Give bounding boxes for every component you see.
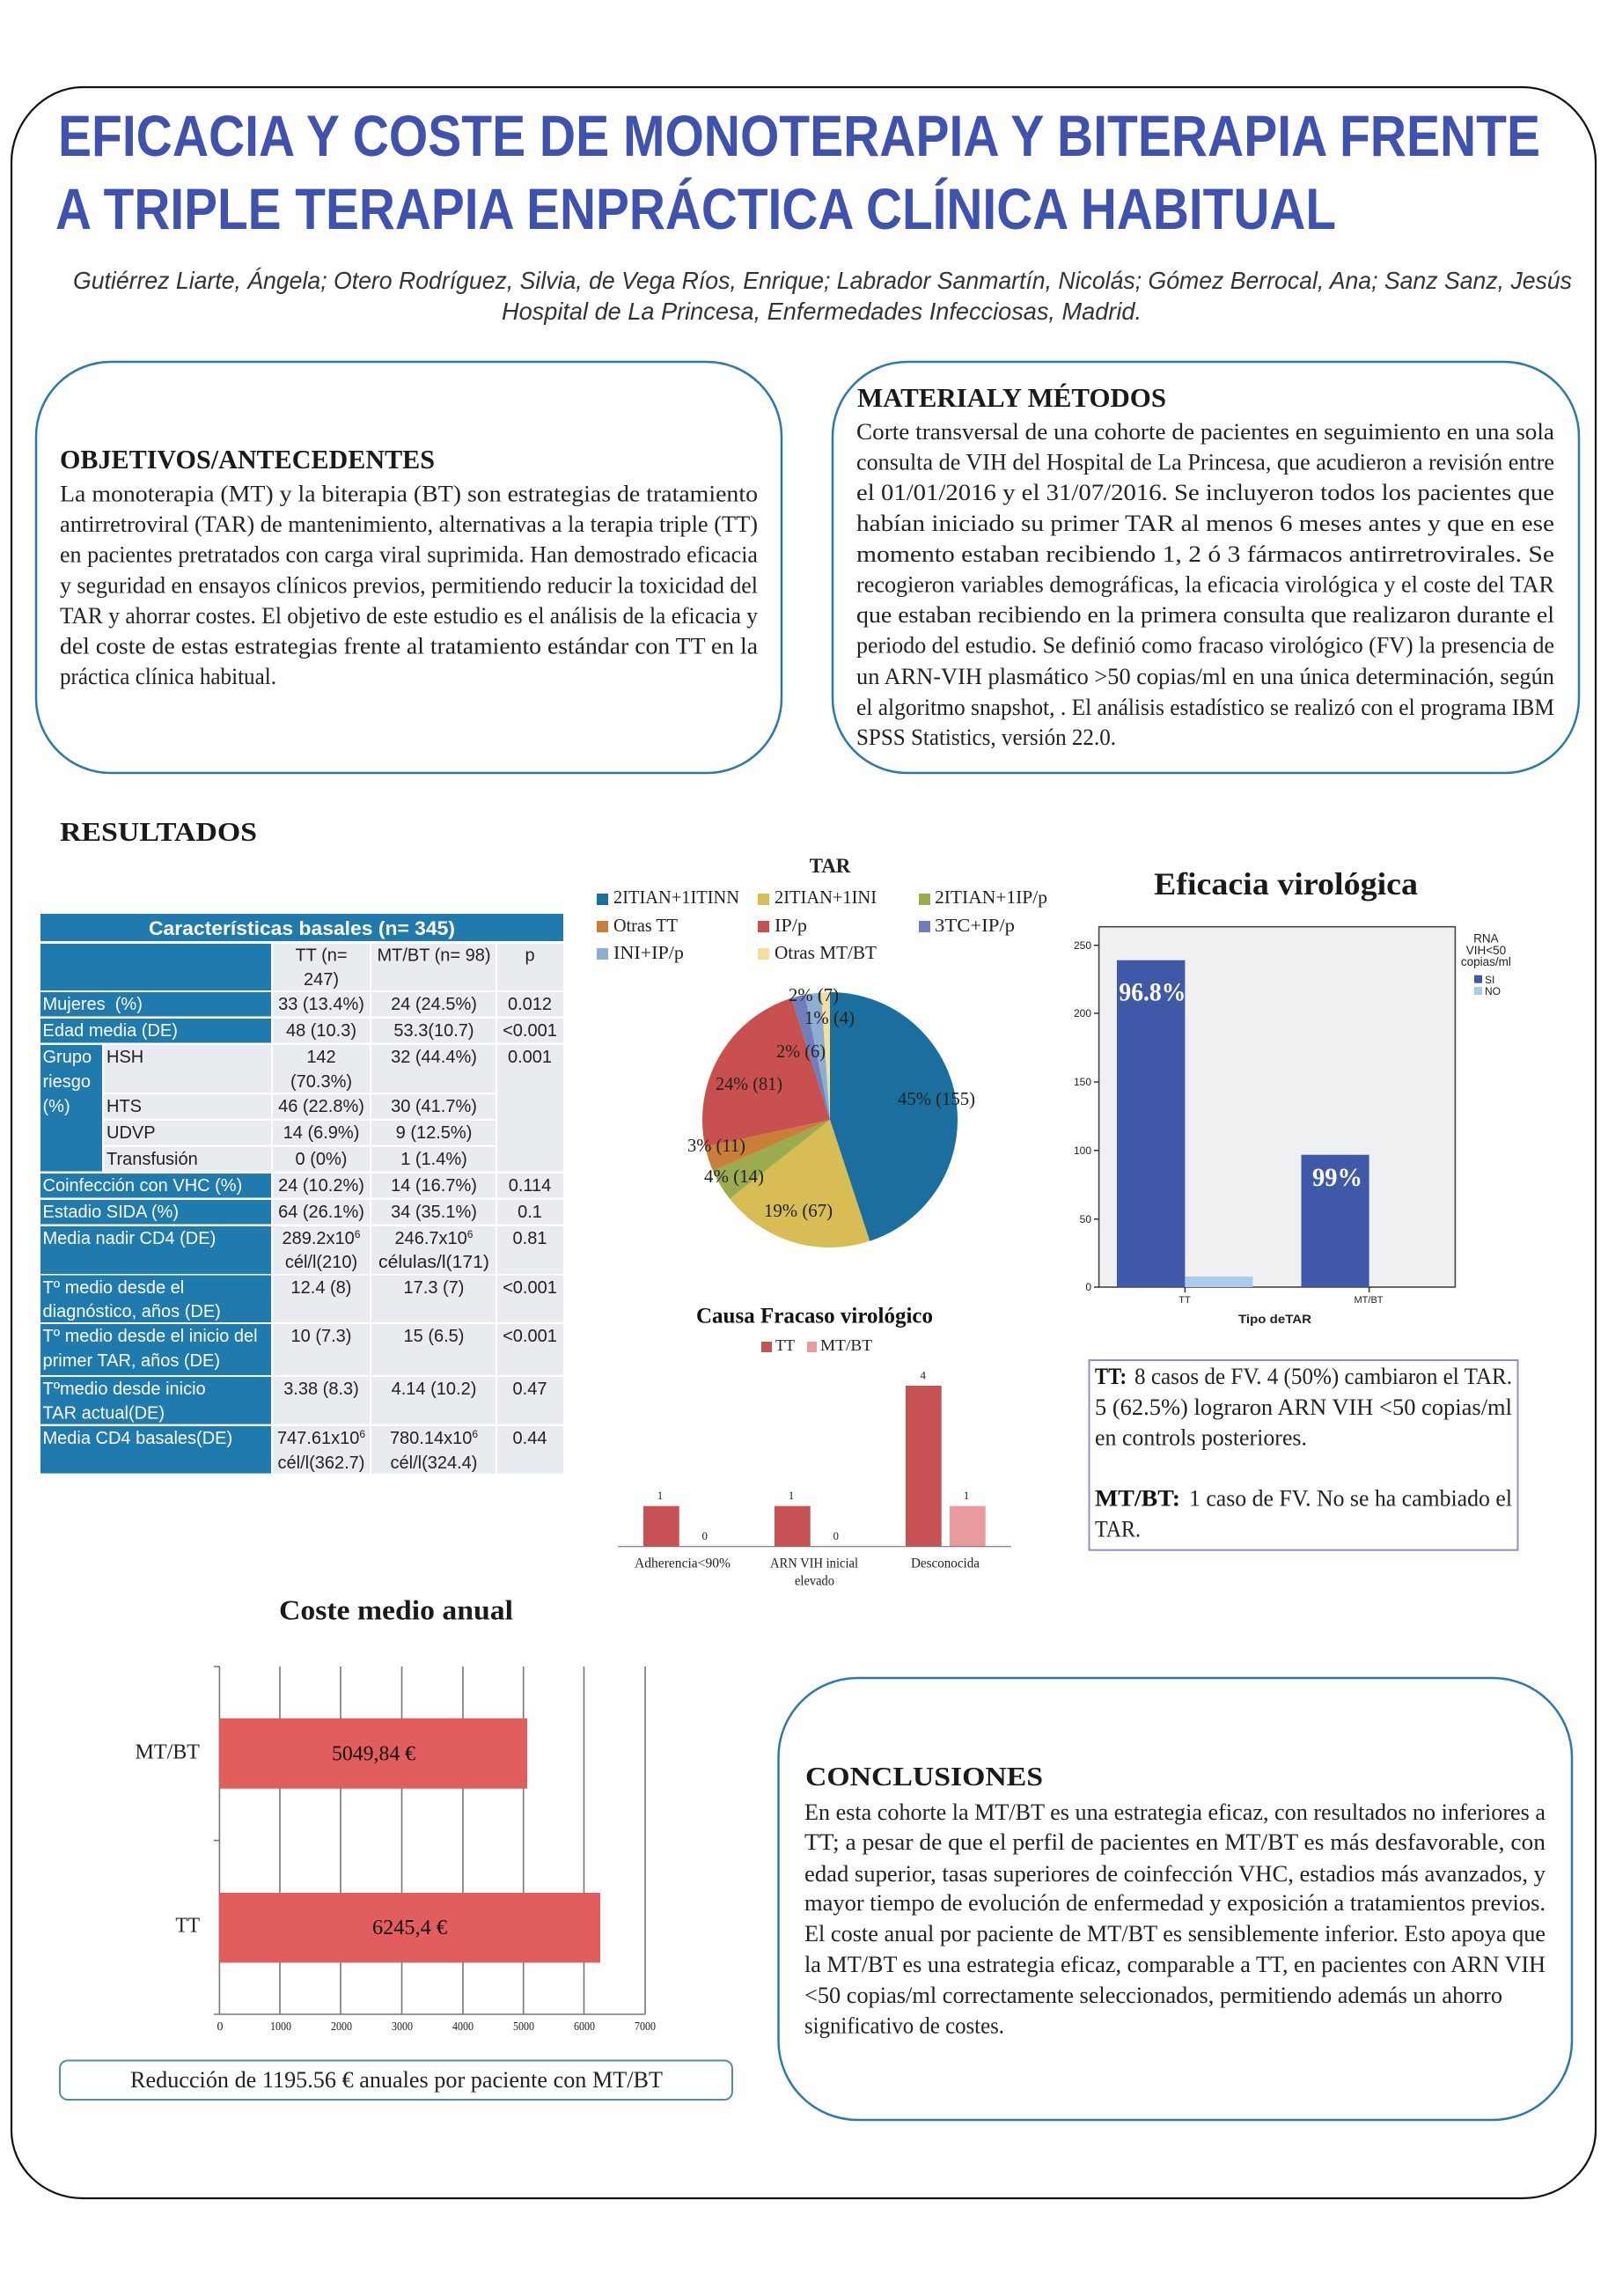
legend: RNA	[1461, 932, 1511, 997]
text: material y metodos: momento estaban recibiendo 1, 2 ó 3 fármacos antirretrovirales. Se	[856, 541, 1554, 567]
bar value labels	[1119, 978, 1362, 1192]
pie labels: 3% (11)	[687, 1135, 745, 1156]
callout: casos de fracaso virologico	[1090, 1360, 1517, 1550]
heading: conclusiones: CONCLUSIONES	[805, 1761, 1043, 1792]
legend: TAR: INI+IP/p	[613, 942, 684, 963]
chart: causa fracaso virologico	[618, 1305, 1011, 1589]
row: media cd4 basales	[40, 1426, 563, 1474]
category labels: Desconocida	[911, 1556, 980, 1571]
legend: RNA: RNA	[1473, 932, 1499, 946]
panel: material y metodos	[833, 362, 1579, 773]
x axis labels: coste: 3000	[392, 2020, 413, 2034]
x axis title: Tipo deTAR	[1238, 1312, 1311, 1326]
rows: grupo riesgo: 46 (22.8%)	[278, 1097, 364, 1116]
text: conclusiones: El coste anual por paciente de MT/BT es sensiblemente inferior. Esto apoya que	[804, 1921, 1546, 1946]
title: A TRIPLE TERAPIA ENPRÁCTICA CLÍNICA HABITUAL	[55, 176, 1336, 241]
table title	[40, 914, 563, 941]
text: material y metodos: el 01/01/2016 y el 31/07/2016. Se incluyeron todos los pacientes que	[856, 480, 1554, 505]
legend: TAR: 2ITIAN+1INI	[775, 887, 877, 908]
row: tiempo desde primer tar: primer TAR, años (DE)	[42, 1351, 220, 1371]
rows: grupo riesgo: (70.3%)	[290, 1072, 352, 1092]
text: material y metodos: que estaban recibiendo en la primera consulta que realizaron durante el	[856, 602, 1554, 628]
rows: grupo riesgo: HSH	[106, 1048, 143, 1067]
row: tiempo desde primer tar: 15 (6.5)	[404, 1327, 464, 1346]
rows: grupo riesgo: 0 (0%)	[296, 1150, 347, 1169]
plot area	[1094, 927, 1455, 1292]
table header row: p	[525, 946, 535, 965]
row: edad media	[40, 1019, 563, 1042]
row: edad media: Edad media (DE)	[42, 1021, 178, 1041]
title	[55, 103, 1540, 241]
row: estadio sida: Estadio SIDA (%)	[42, 1203, 179, 1222]
category labels: ARN VIH inicial	[770, 1556, 858, 1571]
legend: TAR: 2ITIAN+1IP/p	[935, 887, 1047, 908]
row: tiempo tar actual: 4.14 (10.2)	[392, 1380, 476, 1399]
legend: causa fracaso: MT/BT	[820, 1336, 872, 1354]
row: edad media: 53.3(10.7)	[393, 1021, 474, 1041]
table title: Características basales (n= 345)	[149, 917, 455, 939]
rows: grupo riesgo: 32 (44.4%)	[391, 1048, 477, 1067]
rows: grupo riesgo: 14 (6.9%)	[283, 1123, 359, 1143]
x axis labels: coste: 1000	[270, 2020, 291, 2034]
row: tiempo tar actual: 0.47	[513, 1380, 547, 1399]
row: media nadir cd4: 6	[467, 1228, 474, 1240]
table header row: TT (n=	[295, 946, 348, 965]
text: material y metodos: periodo del estudio. Se definió como fracaso virológico (FV) la presencia de	[856, 633, 1554, 659]
text: material y metodos: recogieron variables demográficas, la eficacia virológica y el coste del TAR	[856, 572, 1555, 598]
row: tiempo desde primer tar: <0.001	[503, 1327, 557, 1346]
chart: eficacia virologica	[1074, 866, 1511, 1326]
x axis labels: coste: 0	[217, 2020, 224, 2034]
row: estadio sida: 64 (26.1%)	[278, 1203, 364, 1222]
text: conclusiones: la MT/BT es una estrategia eficaz, comparable a TT, en pacientes con ARN VIH	[804, 1952, 1546, 1977]
chart title: TAR: TAR	[810, 855, 851, 877]
legend: TAR: IP/p	[775, 915, 807, 936]
pie labels: 19% (67)	[764, 1200, 833, 1221]
y axis labels: 250	[1074, 939, 1091, 952]
row: tiempo desde diagnostico: <0.001	[503, 1278, 557, 1298]
legend: causa fracaso	[761, 1336, 872, 1354]
panel: objetivos	[36, 362, 782, 773]
bar values: 0	[701, 1529, 708, 1542]
category labels	[635, 1556, 980, 1589]
rows: grupo riesgo: 1 (1.4%)	[400, 1150, 467, 1169]
table header row	[40, 944, 563, 990]
y axis labels: 200	[1074, 1007, 1091, 1019]
text: conclusiones	[804, 1799, 1546, 2039]
category labels: coste: MT/BT	[136, 1741, 200, 1764]
row: tiempo desde primer tar: 10 (7.3)	[291, 1327, 351, 1346]
rows: grupo riesgo: 9 (12.5%)	[396, 1123, 472, 1143]
row: tiempo tar actual	[40, 1377, 563, 1424]
x axis labels: coste: 7000	[635, 2020, 656, 2034]
rows: grupo riesgo: riesgo	[42, 1072, 91, 1092]
rows: grupo riesgo: Transfusión	[106, 1150, 198, 1169]
row: coinfeccion	[40, 1174, 563, 1197]
x axis labels: TT	[1178, 1295, 1191, 1306]
text: material y metodos: SPSS Statistics, versión 22.0.	[856, 725, 1116, 750]
pie labels: 2% (7)	[789, 984, 839, 1005]
text: conclusiones: En esta cohorte la MT/BT es una estrategia eficaz, con resultados no inferiores a	[804, 1799, 1546, 1825]
category labels: Adherencia<90%	[635, 1556, 731, 1571]
heading: objetivos: OBJETIVOS/ANTECEDENTES	[60, 444, 435, 475]
authors and affiliation: Gutiérrez Liarte, Ángela; Otero Rodríguez, Silvia, de Vega Ríos, Enrique; Labrador Sanmartín, Nicolás; Gómez Berrocal, Ana; Sanz Sanz, Jesús	[73, 267, 1572, 294]
text: objetivos: en pacientes pretratados con carga viral suprimida. Han demostrado eficacia	[60, 542, 758, 568]
row: estadio sida: 34 (35.1%)	[391, 1203, 477, 1222]
legend: TAR	[597, 887, 1047, 963]
row: coinfeccion: Coinfección con VHC (%)	[42, 1176, 242, 1196]
row: mujeres: 0.012	[508, 995, 552, 1014]
y axis labels: 100	[1074, 1144, 1091, 1157]
bar values: 1	[789, 1489, 794, 1502]
legend: RNA: SI	[1485, 974, 1494, 986]
pie labels: 24% (81)	[716, 1073, 782, 1094]
row: tiempo desde diagnostico: diagnóstico, años (DE)	[42, 1302, 221, 1321]
row: media nadir cd4: 246.7x10	[395, 1229, 467, 1248]
row: mujeres	[40, 992, 563, 1016]
rows: grupo riesgo: 30 (41.7%)	[391, 1097, 477, 1116]
row: estadio sida: 0.1	[518, 1203, 542, 1222]
chart title: coste: Coste medio anual	[279, 1593, 513, 1625]
row: media cd4 basales: 747.61x10	[277, 1429, 359, 1448]
chart title: causa fracaso: Causa Fracaso virológico	[696, 1305, 933, 1328]
bar values: 1	[964, 1489, 969, 1502]
rows: grupo riesgo: HTS	[106, 1097, 142, 1116]
row: tiempo tar actual: 3.38 (8.3)	[283, 1380, 359, 1399]
table header row: MT/BT (n= 98)	[377, 946, 491, 965]
y axis labels: 150	[1074, 1076, 1091, 1088]
category labels: coste: TT	[175, 1915, 200, 1938]
text: material y metodos: habían iniciado su primer TAR al menos 6 meses antes y que en ese	[856, 511, 1554, 536]
row: media cd4 basales: 780.14x10	[390, 1429, 472, 1448]
bar values: 1	[657, 1489, 663, 1502]
row: tiempo desde primer tar	[40, 1324, 563, 1375]
row: tiempo desde diagnostico: 17.3 (7)	[404, 1278, 464, 1298]
legend: RNA: NO	[1485, 985, 1501, 997]
text: conclusiones: edad superior, tasas superiores de coinfección VHC, estadios más avanzados, y	[804, 1861, 1546, 1887]
chart: TAR pie	[597, 855, 1047, 1221]
row: edad media: <0.001	[503, 1021, 557, 1041]
text: conclusiones: <50 copias/ml correctamente seleccionados, permitiendo además un ahorro	[804, 1983, 1502, 2008]
x axis labels: MT/BT	[1354, 1295, 1384, 1306]
text: conclusiones: TT; a pesar de que el perfil de pacientes en MT/BT es más desfavorable, con	[804, 1829, 1546, 1855]
pie labels: 1% (4)	[804, 1007, 855, 1028]
legend: TAR: Otras TT	[613, 915, 678, 936]
row: tiempo desde diagnostico: 12.4 (8)	[291, 1278, 351, 1298]
axes and gridlines	[214, 1667, 645, 2014]
table header row: 247)	[304, 970, 339, 990]
row: coinfeccion: 14 (16.7%)	[391, 1176, 477, 1196]
row: media nadir cd4: 289.2x10	[283, 1229, 355, 1248]
row: coinfeccion: 0.114	[509, 1176, 551, 1196]
row: tiempo desde diagnostico: Tº medio desde el	[42, 1278, 184, 1298]
text: objetivos	[60, 481, 758, 689]
bars: causa fracaso	[618, 1386, 1011, 1547]
bar values: 0	[833, 1529, 839, 1542]
x axis labels: coste	[217, 2020, 656, 2034]
x axis labels: coste: 5000	[513, 2020, 534, 2034]
row: media nadir cd4: 0.81	[513, 1229, 547, 1248]
row: media cd4 basales: 6	[472, 1428, 478, 1440]
category labels: coste	[136, 1741, 200, 1938]
authors and affiliation	[73, 267, 1572, 325]
chart: coste medio anual	[136, 1593, 656, 2034]
legend: RNA: copias/ml	[1461, 955, 1511, 968]
bar values	[657, 1369, 969, 1542]
text: material y metodos: Corte transversal de una cohorte de pacientes en seguimiento en una sola	[856, 419, 1554, 445]
bar values: 4	[920, 1369, 926, 1382]
row: edad media: 48 (10.3)	[286, 1021, 356, 1041]
callout: casos de fracaso virologico: TT:	[1095, 1364, 1127, 1389]
callout: casos de fracaso virologico: 1 caso de FV. No se ha cambiado el	[1189, 1486, 1512, 1512]
row: media nadir cd4	[40, 1226, 563, 1274]
pie labels: 45% (155)	[898, 1088, 975, 1109]
category labels: elevado	[795, 1574, 834, 1589]
y axis labels: 0	[1085, 1281, 1091, 1293]
row: tiempo tar actual: TAR actual(DE)	[42, 1404, 165, 1424]
callout: casos de fracaso virologico: 5 (62.5%) lograron ARN VIH <50 copias/ml	[1095, 1395, 1512, 1420]
text: material y metodos: consulta de VIH del Hospital de La Princesa, que acudieron a revisión entre	[856, 449, 1554, 475]
text: objetivos: antirretroviral (TAR) de mantenimiento, alternativas a la terapia triple (TT)	[60, 511, 758, 537]
callout: casos de fracaso virologico: TAR.	[1095, 1517, 1141, 1542]
row: media cd4 basales: 6	[359, 1428, 365, 1440]
bar value labels: 99%	[1312, 1163, 1362, 1192]
authors and affiliation: Hospital de La Princesa, Enfermedades Infecciosas, Madrid.	[502, 298, 1142, 325]
row: estadio sida	[40, 1200, 563, 1224]
bar value labels: 96.8%	[1119, 978, 1186, 1007]
row: media nadir cd4: 6	[355, 1228, 361, 1240]
heading: resultados: RESULTADOS	[60, 816, 257, 847]
rows: grupo riesgo: 0.001	[508, 1048, 552, 1067]
text: objetivos: del coste de estas estrategias frente al tratamiento estándar con TT en la	[60, 634, 758, 659]
bar value labels: coste: 5049,84 €	[332, 1743, 415, 1766]
row: mujeres: 33 (13.4%)	[278, 995, 364, 1014]
row: media nadir cd4: células/l(171)	[378, 1253, 489, 1272]
text: objetivos: y seguridad en ensayos clínicos previos, permitiendo reducir la toxicidad del	[60, 572, 758, 598]
y axis labels: 50	[1080, 1213, 1091, 1225]
row: media cd4 basales: cél/l(324.4)	[391, 1453, 477, 1473]
y axis labels	[1074, 939, 1091, 1293]
text: material y metodos	[856, 419, 1555, 750]
chart title: eficacia: Eficacia virológica	[1154, 866, 1418, 901]
x axis labels: coste: 2000	[331, 2020, 352, 2034]
pie labels	[687, 984, 975, 1221]
callout: reduccion de coste: Reducción de 1195.56 € anuales por paciente con MT/BT	[130, 2067, 663, 2093]
pie labels: 4% (14)	[704, 1166, 764, 1187]
row: mujeres: 24 (24.5%)	[391, 995, 477, 1014]
text: objetivos: TAR y ahorrar costes. El objetivo de este estudio es el análisis de la eficacia y	[60, 603, 758, 629]
heading: material y metodos: MATERIALY MÉTODOS	[857, 382, 1166, 413]
x axis labels: coste: 6000	[574, 2020, 595, 2034]
row: media nadir cd4: cél/l(210)	[285, 1253, 357, 1272]
bar value labels: coste: 6245,4 €	[372, 1917, 447, 1939]
rows: grupo riesgo: 142	[306, 1048, 336, 1067]
pie slices	[766, 1056, 894, 1183]
callout: casos de fracaso virologico: MT/BT:	[1095, 1486, 1180, 1512]
row: tiempo tar actual: Tºmedio desde inicio	[42, 1380, 206, 1399]
row: coinfeccion: 24 (10.2%)	[278, 1176, 364, 1196]
rows: grupo riesgo: Grupo	[42, 1048, 92, 1067]
row: media nadir cd4: Media nadir CD4 (DE)	[42, 1229, 216, 1248]
bar value labels: coste	[332, 1743, 447, 1939]
callout: casos de fracaso virologico: en controls posteriores.	[1095, 1425, 1307, 1451]
rows: grupo riesgo: (%)	[42, 1097, 70, 1116]
x axis labels: coste: 4000	[452, 2020, 474, 2034]
x axis labels	[1178, 1295, 1384, 1306]
pie labels: 2% (6)	[776, 1041, 826, 1062]
legend: TAR: 2ITIAN+1ITINN	[613, 887, 739, 908]
text: objetivos: La monoterapia (MT) y la biterapia (BT) son estrategias de tratamiento	[60, 481, 758, 507]
table: caracteristicas basales	[40, 914, 563, 1474]
legend: RNA: VIH<50	[1466, 944, 1506, 957]
text: objetivos: práctica clínica habitual.	[60, 664, 276, 689]
panel: conclusiones	[778, 1678, 1572, 2120]
bars: coste	[219, 1718, 600, 1962]
callout: reduccion de coste	[60, 2060, 732, 2100]
legend: TAR: Otras MT/BT	[775, 942, 877, 963]
legend: TAR: 3TC+IP/p	[935, 915, 1015, 936]
legend: causa fracaso: TT	[775, 1336, 795, 1354]
row: media cd4 basales: cél/l(362.7)	[278, 1453, 364, 1473]
row: media cd4 basales: Media CD4 basales(DE)	[42, 1429, 232, 1448]
rows: grupo riesgo: UDVP	[106, 1123, 156, 1143]
callout: casos de fracaso virologico: 8 casos de FV. 4 (50%) cambiaron el TAR.	[1134, 1364, 1512, 1389]
text: material y metodos: el algoritmo snapshot, . El análisis estadístico se realizó con el programa IBM	[856, 695, 1554, 720]
row: tiempo desde primer tar: Tº medio desde el inicio del	[42, 1327, 258, 1346]
row: mujeres: Mujeres (%)	[42, 995, 143, 1014]
text: conclusiones: significativo de costes.	[804, 2013, 1004, 2039]
rows: grupo riesgo	[40, 1045, 563, 1171]
text: material y metodos: un ARN-VIH plasmático >50 copias/ml en una única determinación, según	[856, 664, 1554, 689]
row: tiempo desde diagnostico	[40, 1275, 563, 1322]
row: media cd4 basales: 0.44	[513, 1429, 547, 1448]
text: conclusiones: mayor tiempo de evolución de enfermedad y exposición a tratamientos previos.	[804, 1890, 1546, 1916]
